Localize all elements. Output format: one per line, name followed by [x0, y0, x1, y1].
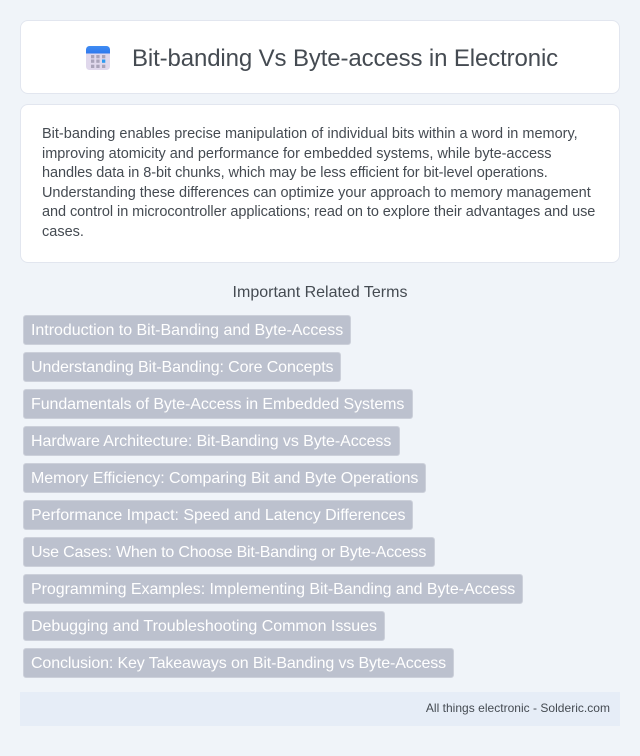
tag 5: Memory Efficiency: Comparing Bit and Byte Operations: [31, 470, 418, 487]
tag 1: Introduction to Bit-Banding and Byte-Access: [31, 322, 343, 339]
tag 6: Performance Impact: Speed and Latency Differences: [31, 507, 405, 524]
tag 4: [23, 426, 400, 456]
tag 7: Use Cases: When to Choose Bit-Banding or Byte-Access: [31, 544, 426, 561]
tag 9: [23, 611, 385, 641]
heading: related terms: Important Related Terms: [233, 284, 407, 301]
tag 10: [23, 648, 454, 678]
panel: description card: [20, 104, 620, 263]
tag 1: [23, 315, 351, 345]
tag 8: Programming Examples: Implementing Bit-Banding and Byte-Access: [31, 581, 515, 598]
text block: description: Understanding these differences can optimize your approach to memory management: [42, 185, 591, 201]
panel: header: [20, 20, 620, 94]
tag 5: [23, 463, 426, 493]
tag 3: Fundamentals of Byte-Access in Embedded Systems: [31, 396, 404, 413]
tag 8: [23, 574, 523, 604]
text block: description: [42, 126, 595, 240]
text block: description: cases.: [42, 224, 84, 240]
footer: All things electronic - Solderic.com: [426, 701, 610, 715]
tag 7: [23, 537, 435, 567]
text block: description: Bit-banding enables precise manipulation of individual bits within a word in memory,: [42, 126, 578, 142]
footer: [20, 692, 620, 726]
tag 4: Hardware Architecture: Bit-Banding vs Byte-Access: [31, 433, 391, 450]
tag 2: [23, 352, 341, 382]
tag 9: Debugging and Troubleshooting Common Issues: [31, 618, 377, 635]
icon: calendar grid: [86, 46, 110, 70]
text block: description: improving atomicity and performance for embedded systems, while byte-access: [42, 146, 551, 162]
tag 6: [23, 500, 413, 530]
tag 3: [23, 389, 413, 419]
tag 10: Conclusion: Key Takeaways on Bit-Banding vs Byte-Access: [31, 655, 446, 672]
text block: description: and control in microcontroller applications; read on to explore their advantages and use: [42, 204, 595, 220]
tag 2: Understanding Bit-Banding: Core Concepts: [31, 359, 333, 376]
text block: description: handles data in 8-bit chunks, which may be less efficient for bit-level operations.: [42, 165, 548, 181]
title: Bit-banding Vs Byte-access in Electronic: [132, 45, 558, 72]
